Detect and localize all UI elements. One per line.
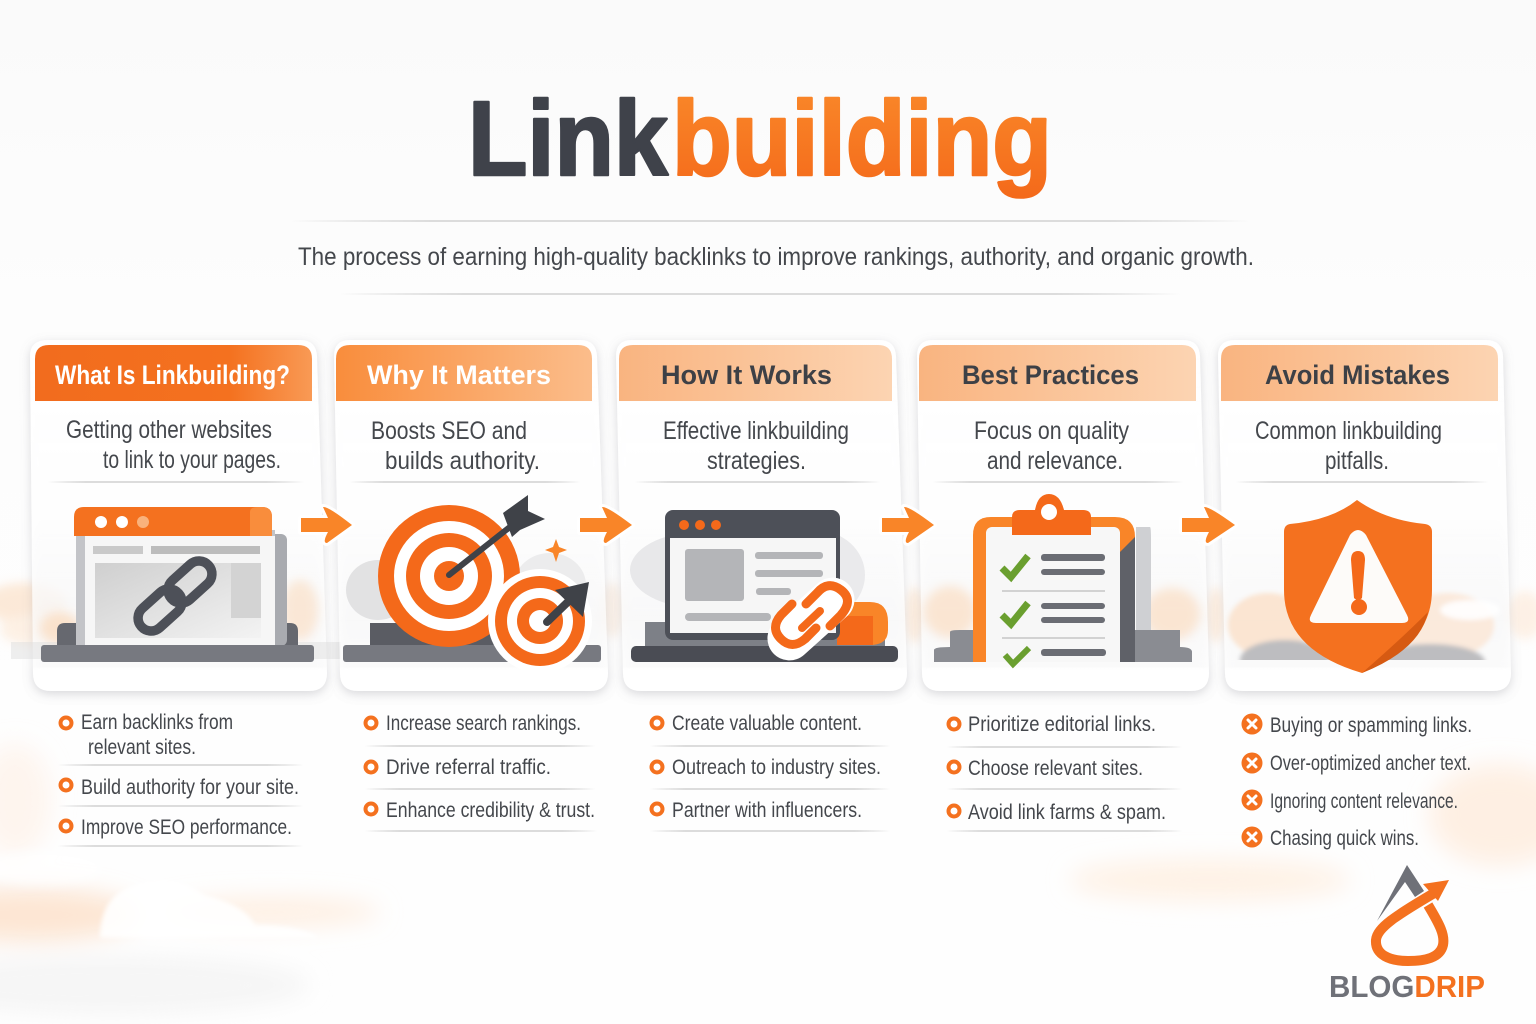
header: Why It Matters — [367, 360, 551, 390]
list: why it matters: Increase search rankings. — [386, 711, 581, 735]
cloud detail bottom left — [0, 850, 320, 938]
list: what is linkbuilding: Earn backlinks from — [81, 710, 233, 734]
header: How It Works — [661, 360, 832, 390]
header — [35, 345, 312, 401]
icon: target with arrow — [343, 495, 601, 673]
subtitle: The process of earning high-quality backlinks to improve rankings, authority, and organic growth. — [298, 243, 1254, 271]
icon: clipboard checklist — [934, 494, 1192, 664]
arrow 2 — [580, 507, 632, 543]
list: what is linkbuilding: Build authority for your site. — [81, 775, 299, 799]
list: what is linkbuilding — [58, 710, 303, 847]
description: to link to your pages. — [103, 446, 281, 474]
list: best practices: Avoid link farms & spam. — [968, 800, 1166, 824]
description: pitfalls. — [1325, 447, 1389, 475]
list: how it works: Partner with influencers. — [672, 798, 862, 822]
title: building — [672, 80, 1052, 198]
list: avoid mistakes: Over-optimized ancher text. — [1270, 751, 1471, 775]
description — [1255, 417, 1442, 475]
description — [663, 417, 849, 475]
panel: best practices — [917, 340, 1209, 691]
logo: BlogDrip: BLOGDRIP — [1329, 969, 1485, 1004]
description: Focus on quality — [974, 417, 1129, 445]
arrow 1 — [301, 507, 352, 543]
list: how it works — [650, 711, 890, 832]
header: What Is Linkbuilding? — [55, 360, 290, 390]
header — [1221, 345, 1498, 401]
list: why it matters — [365, 711, 597, 832]
list: why it matters: Drive referral traffic. — [386, 755, 551, 779]
list: avoid mistakes — [1242, 713, 1472, 850]
list: how it works: Create valuable content. — [672, 711, 862, 735]
description: and relevance. — [987, 447, 1123, 475]
list: why it matters: Enhance credibility & trust. — [386, 798, 595, 822]
header: Best Practices — [962, 360, 1139, 390]
description: strategies. — [707, 447, 806, 475]
list: avoid mistakes: Chasing quick wins. — [1270, 826, 1419, 850]
list: best practices: Choose relevant sites. — [968, 756, 1143, 780]
description: Effective linkbuilding — [663, 417, 849, 445]
list: avoid mistakes: Ignoring content relevance. — [1270, 789, 1458, 813]
description — [66, 416, 281, 474]
arrow 4 — [1182, 507, 1235, 543]
description: Common linkbuilding — [1255, 417, 1442, 445]
list: what is linkbuilding: Improve SEO performance. — [81, 815, 292, 839]
description: builds authority. — [385, 447, 540, 475]
title: Link — [468, 80, 669, 198]
description: Boosts SEO and — [371, 417, 527, 445]
description — [974, 417, 1129, 475]
panel: what is linkbuilding — [11, 340, 341, 691]
arrow 3 — [882, 507, 934, 543]
logo: BlogDrip — [1329, 865, 1485, 1004]
list: how it works: Outreach to industry sites. — [672, 755, 881, 779]
list: best practices: Prioritize editorial links. — [968, 712, 1156, 736]
icon: browser with orange link — [630, 510, 898, 669]
list: what is linkbuilding: relevant sites. — [88, 735, 196, 759]
header — [336, 345, 592, 401]
header — [919, 345, 1196, 401]
icon: browser with chain link — [11, 507, 341, 662]
panel: avoid mistakes — [1218, 340, 1511, 691]
list: avoid mistakes: Buying or spamming links. — [1270, 713, 1472, 737]
panel: why it matters — [334, 340, 608, 691]
header — [619, 345, 892, 401]
list: best practices — [947, 712, 1182, 832]
header: Avoid Mistakes — [1265, 360, 1450, 390]
panel: how it works — [616, 340, 907, 691]
description — [371, 417, 540, 475]
description: Getting other websites — [66, 416, 272, 444]
icon: warning shield — [1228, 500, 1500, 680]
